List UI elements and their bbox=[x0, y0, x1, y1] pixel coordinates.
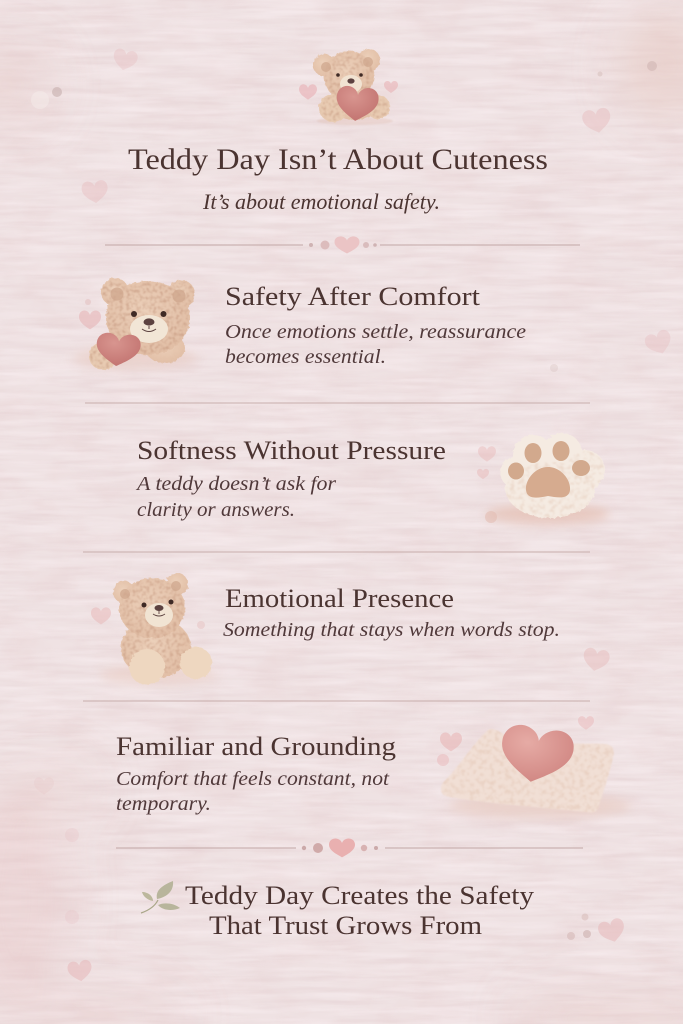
subtitle: It’s about emotional safety. bbox=[202, 189, 440, 214]
closing statement bbox=[185, 881, 534, 940]
description: A teddy doesn’t ask for bbox=[135, 473, 337, 495]
description: clarity or answers. bbox=[137, 499, 295, 521]
icon: top teddy bear holding heart bbox=[299, 49, 398, 125]
description bbox=[116, 768, 390, 815]
description: temporary. bbox=[116, 793, 211, 815]
icon: heart on pillow bbox=[437, 716, 632, 819]
icon: leaf sprig bbox=[141, 881, 180, 913]
description: Comfort that feels constant, not bbox=[116, 768, 390, 790]
description: Once emotions settle, reassurance bbox=[225, 321, 526, 343]
heading: Softness Without Pressure bbox=[137, 436, 446, 465]
title: Teddy Day Isn’t About Cuteness bbox=[128, 143, 548, 176]
description: Something that stays when words stop. bbox=[223, 619, 560, 641]
section: Softness Without Pressure bbox=[135, 433, 610, 525]
heading: Safety After Comfort bbox=[225, 282, 481, 311]
icon: teddy bear with heart bbox=[73, 278, 197, 370]
section: Safety After Comfort bbox=[73, 278, 526, 370]
section: Emotional Presence bbox=[91, 573, 560, 685]
description bbox=[135, 473, 337, 521]
feet bbox=[129, 647, 212, 685]
section: Familiar and Grounding bbox=[116, 716, 632, 819]
closing statement: That Trust Grows From bbox=[209, 911, 482, 940]
description: becomes essential. bbox=[225, 346, 386, 368]
heading: Emotional Presence bbox=[225, 584, 454, 613]
closing statement: Teddy Day Creates the Safety bbox=[185, 881, 534, 910]
icon: sitting teddy bear bbox=[91, 573, 216, 685]
icon: teddy paw bbox=[477, 433, 610, 525]
heading: Familiar and Grounding bbox=[116, 732, 396, 761]
description bbox=[225, 321, 526, 368]
divider with heart: top bbox=[105, 236, 580, 254]
divider with heart: bottom bbox=[116, 839, 583, 857]
